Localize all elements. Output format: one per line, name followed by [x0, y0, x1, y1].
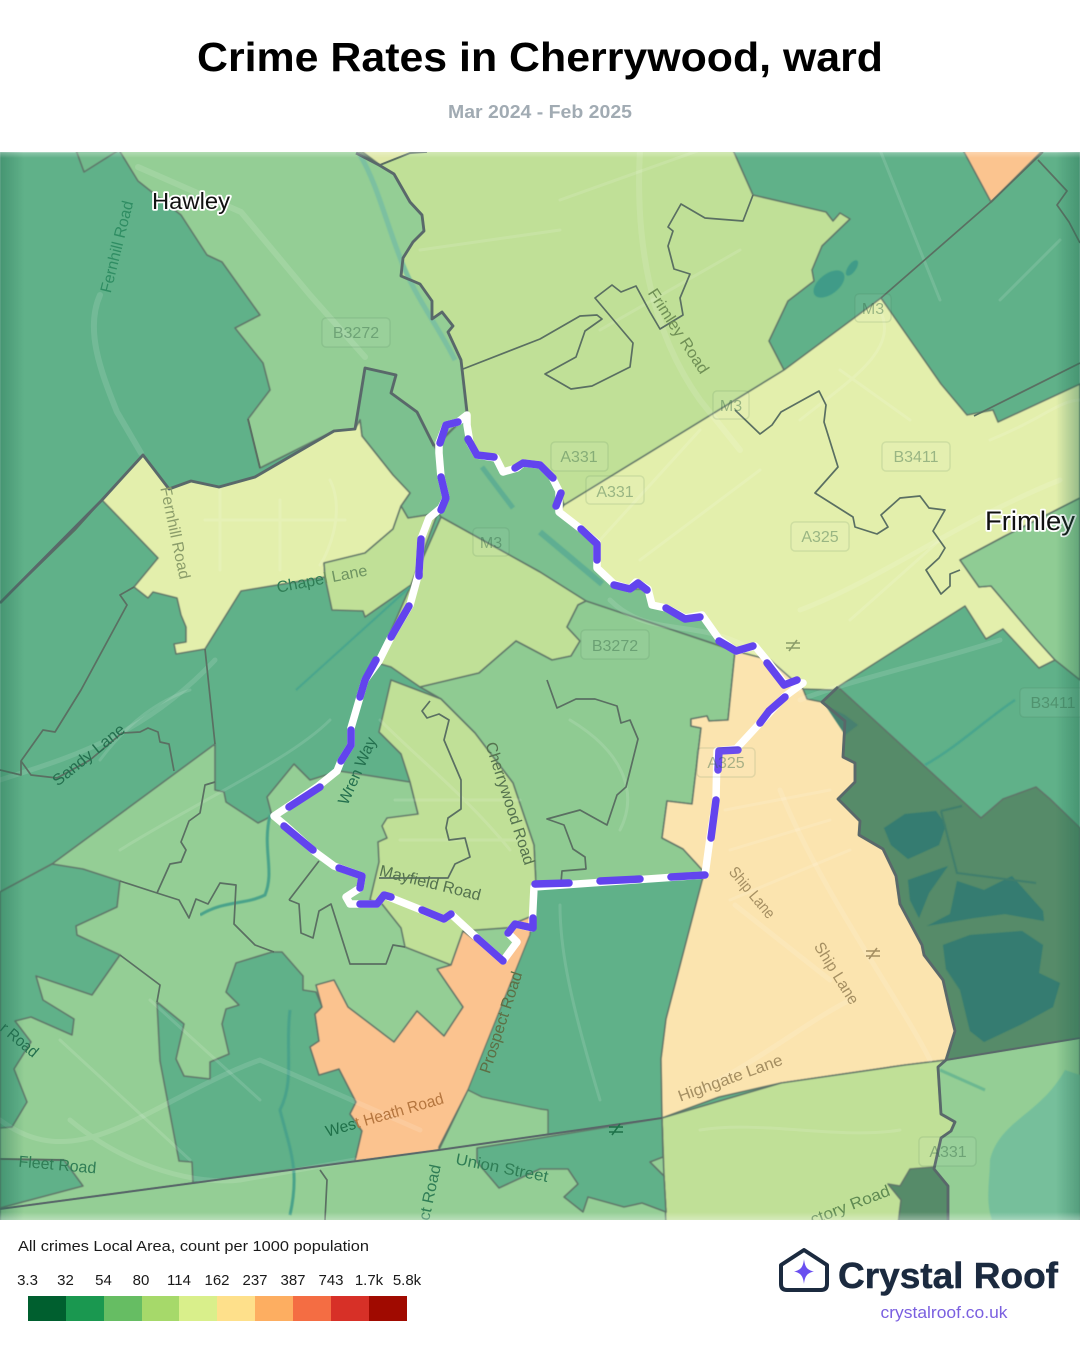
- road number shields: B3411: [1030, 695, 1076, 712]
- road number shields: A331: [929, 1144, 967, 1161]
- legend scale values: 237: [242, 1272, 268, 1289]
- legend scale values: 54: [95, 1272, 112, 1289]
- road name labels: Highgate Lane: [676, 1052, 785, 1106]
- logo: Crystal Roof: [781, 1250, 1059, 1322]
- place label: Hawley: Hawley: [152, 188, 231, 214]
- map edge fades: [0, 152, 1080, 1220]
- road name labels: ect Road: [414, 1163, 445, 1231]
- place label: Frimley: Frimley: [985, 506, 1075, 536]
- road name labels: Sandy Lane: [50, 721, 129, 790]
- road number shields: B3272: [592, 638, 638, 655]
- road name labels: West Heath Road: [324, 1091, 446, 1141]
- subtitle: date range: Mar 2024 - Feb 2025: [448, 102, 632, 122]
- thick boundary lines: river and parish edges: [0, 153, 1080, 1222]
- legend: [17, 1238, 422, 1321]
- road number shields: M3: [862, 301, 884, 318]
- internal ward boundaries: [0, 152, 1080, 1220]
- road number shields: A331: [596, 484, 634, 501]
- road number shields: A325: [801, 529, 839, 546]
- road name labels: Frimley Road: [644, 286, 712, 377]
- legend scale values: 3.3: [17, 1272, 38, 1289]
- road number shields: [322, 294, 1080, 1166]
- road name labels: Fleet Road: [18, 1154, 97, 1177]
- Cherrywood ward outline: white base: [274, 415, 803, 961]
- legend scale values: 5.8k: [393, 1272, 422, 1289]
- road name labels: Wren Way: [335, 735, 380, 808]
- legend scale values: 114: [167, 1272, 191, 1289]
- road name labels: Fernhill Road: [98, 199, 137, 295]
- road number shields: B3411: [893, 449, 939, 466]
- road name labels: Fernhill Road: [156, 485, 192, 581]
- legend scale values: 743: [318, 1272, 344, 1289]
- road name labels: Prospect Road: [477, 970, 526, 1076]
- icon: railway station Union Street: [609, 1124, 623, 1135]
- road name labels: [0, 199, 893, 1231]
- legend scale values: 162: [204, 1272, 230, 1289]
- logo wordmark: Crystal Roof: [838, 1255, 1059, 1296]
- road name labels: Chapel Lane: [275, 562, 369, 597]
- title: Crime Rates in Cherrywood, ward: [197, 34, 883, 80]
- legend scale values: 32: [57, 1272, 74, 1289]
- legend scale values: [17, 1272, 422, 1289]
- road name labels: Mayfield Road: [378, 863, 483, 904]
- legend colour swatches: [28, 1296, 407, 1321]
- road number shields: M3: [480, 535, 502, 552]
- map areas: crime rate polygons: [0, 150, 1080, 1225]
- road number shields: M3: [720, 398, 742, 415]
- Cherrywood ward outline: purple dashes: [284, 422, 797, 961]
- road number shields: A325: [707, 755, 745, 772]
- icon: house with sparkle: [781, 1250, 827, 1290]
- icon: railway station Ship Lane: [866, 948, 880, 959]
- road name labels: ctory Road: [808, 1183, 893, 1229]
- icon: railway station Frimley: [786, 640, 800, 651]
- road number shields: B3272: [333, 325, 379, 342]
- logo url: crystalroof.co.uk: [880, 1304, 1008, 1322]
- road network: [0, 150, 1080, 1181]
- water bodies: [200, 155, 1080, 1220]
- road name labels: Ship Lane: [725, 864, 778, 922]
- road name labels: Cherrywood Road: [481, 740, 537, 867]
- road name labels: Ship Lane: [810, 939, 862, 1008]
- road name labels: Union Street: [454, 1151, 550, 1186]
- road number shields: A331: [560, 449, 598, 466]
- legend title: All crimes Local Area, count per 1000 population: [18, 1238, 369, 1255]
- legend scale values: 387: [280, 1272, 306, 1289]
- legend scale values: 1.7k: [355, 1272, 384, 1289]
- legend scale values: 80: [133, 1272, 149, 1289]
